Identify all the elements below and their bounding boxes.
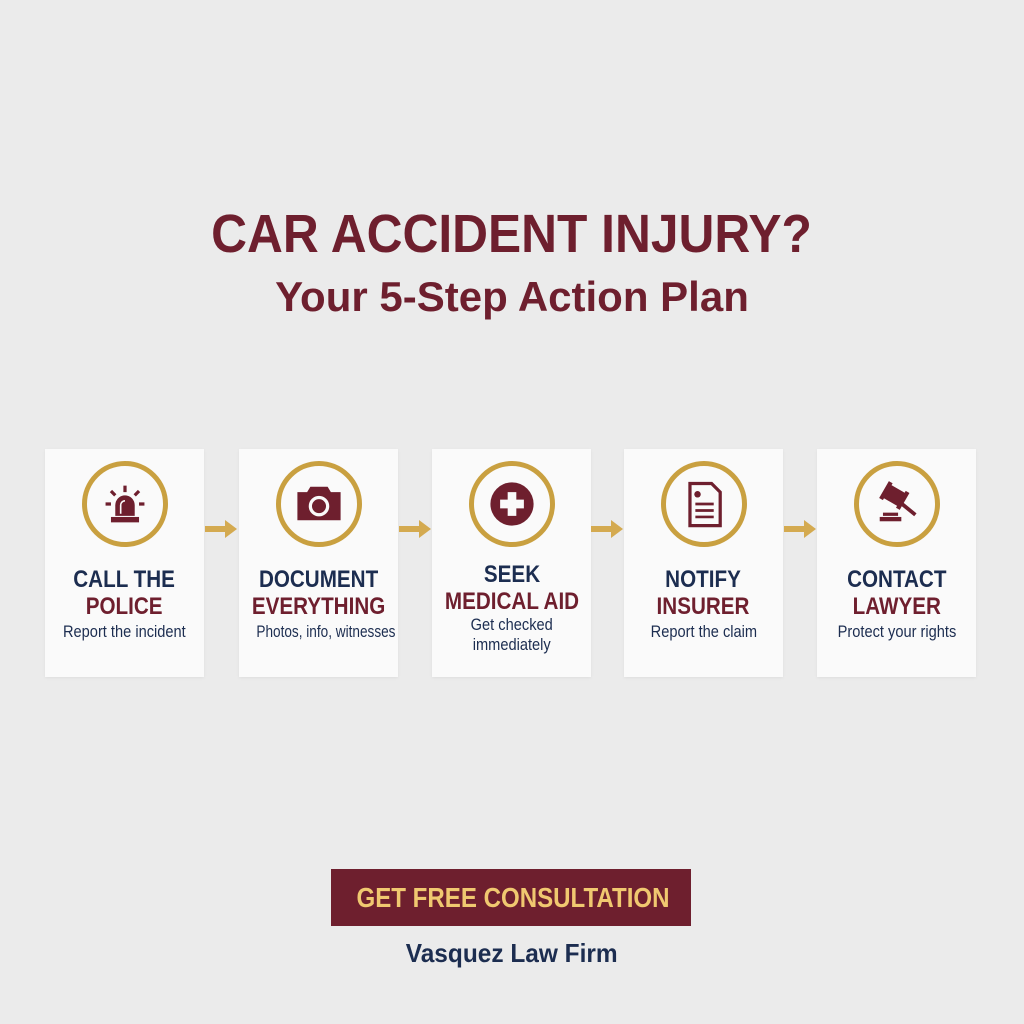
heading <box>252 566 385 620</box>
firm name: Vasquez Law Firm <box>406 938 618 968</box>
heading: NOTIFY <box>666 566 741 593</box>
icon: camera <box>276 461 362 547</box>
arrow <box>591 520 623 538</box>
card: seek medical aid <box>432 449 591 677</box>
button: get free consultation: GET FREE CONSULTATION <box>356 882 670 913</box>
text: Protect your rights <box>837 622 956 641</box>
heading <box>657 566 750 620</box>
button: get free consultation <box>331 869 691 926</box>
heading: CALL THE <box>74 566 175 593</box>
heading: INSURER <box>657 593 750 620</box>
text: Report the incident <box>63 622 186 641</box>
heading: POLICE <box>86 593 163 620</box>
text <box>470 615 553 654</box>
icon: siren <box>82 461 168 547</box>
heading: DOCUMENT <box>259 566 378 593</box>
card: call the police <box>45 449 204 677</box>
heading: CONTACT <box>847 566 946 593</box>
heading: LAWYER <box>852 593 941 620</box>
text: Photos, info, witnesses <box>256 622 395 641</box>
text: immediately <box>472 635 550 654</box>
arrow <box>205 520 237 538</box>
heading <box>444 561 579 615</box>
icon: medical cross <box>469 461 555 547</box>
text: Get checked <box>470 615 553 634</box>
card: notify insurer <box>624 449 783 677</box>
icon: document <box>661 461 747 547</box>
heading <box>847 566 946 620</box>
arrow <box>399 520 431 538</box>
arrow <box>784 520 816 538</box>
heading: SEEK <box>483 561 540 588</box>
icon: gavel <box>854 461 940 547</box>
heading: MEDICAL AID <box>444 588 579 615</box>
text: Report the claim <box>650 622 757 641</box>
card: document everything <box>239 449 398 677</box>
card: contact lawyer <box>817 449 976 677</box>
subtitle: Your 5-Step Action Plan <box>275 273 749 320</box>
heading: EVERYTHING <box>252 593 385 620</box>
heading <box>74 566 175 620</box>
title: CAR ACCIDENT INJURY? <box>212 204 812 264</box>
